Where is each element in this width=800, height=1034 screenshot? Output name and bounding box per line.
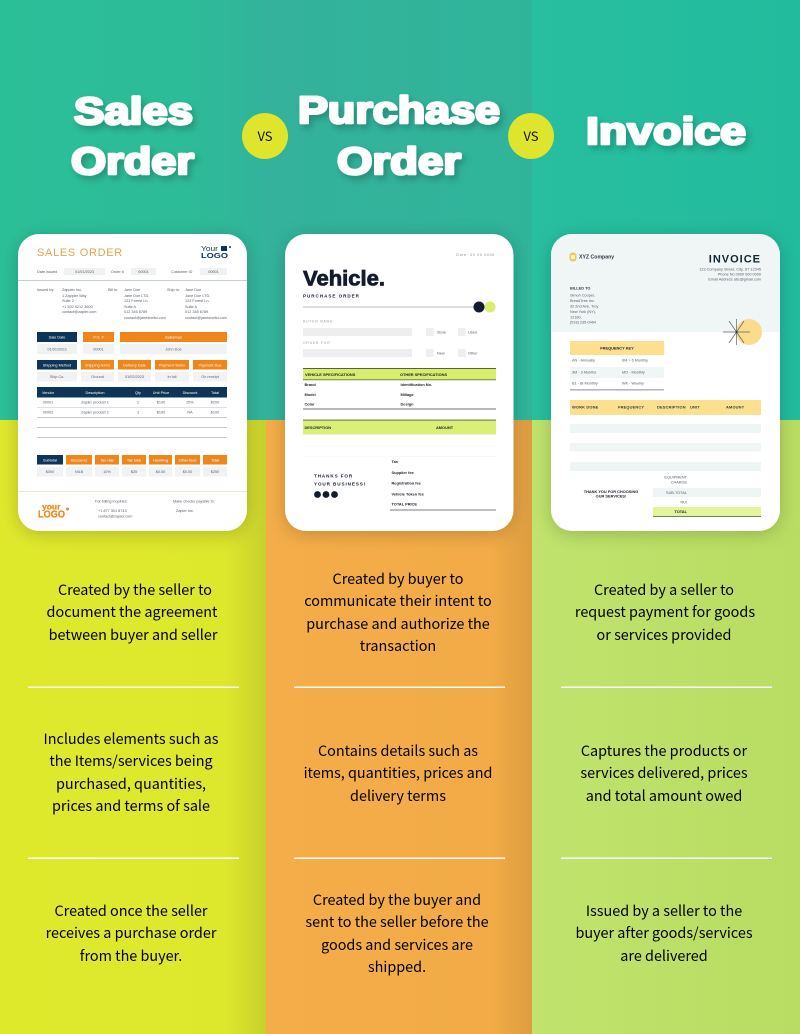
vehicle specifications table: Color	[304, 402, 315, 406]
address block: 1 Zappier Way	[62, 294, 87, 298]
address block: contact@janedoeltd.com	[124, 316, 166, 320]
totals block: CHARGE	[671, 480, 687, 484]
address block: Issued by:	[37, 288, 54, 292]
fee summary: TOTAL PRICE	[392, 502, 417, 506]
totals table: 10%	[103, 470, 111, 474]
sale info table: John Doe	[165, 348, 182, 352]
totals table: Other fees	[179, 458, 196, 462]
company address	[699, 268, 761, 282]
text block: purchase order contents: Contains details such as	[318, 740, 478, 761]
icon: your logo navy: Your	[201, 246, 219, 253]
shipping info table: Shipping Method	[43, 363, 71, 367]
address block: Jane Doe	[124, 288, 140, 292]
icon: your logo orange	[38, 502, 69, 520]
billed to block: Simon Cooper,	[570, 294, 595, 298]
text block: sales order timing: Created once the seller	[54, 900, 208, 921]
totals block: TAX	[680, 500, 687, 504]
frequency key table: FREQUENCY KEY	[600, 346, 634, 350]
panel: sales order document	[18, 234, 247, 531]
icon: your logo navy: LOGO	[201, 251, 228, 260]
fee summary: Supplier fee	[392, 470, 415, 475]
order meta row: Customer ID	[171, 270, 193, 274]
sale info table	[37, 332, 227, 354]
work table: AMOUNT	[726, 404, 745, 410]
line items table: Discount	[183, 391, 198, 395]
totals block: TOTAL	[674, 509, 688, 514]
icon: your logo orange: LOGO	[38, 510, 65, 520]
line items table: Zapier product 2	[81, 410, 109, 414]
text block: purchase order purpose: transaction	[360, 635, 436, 656]
line items table: 00001	[43, 400, 53, 404]
address block: 012 345 6789	[124, 310, 147, 314]
order meta row: Order #	[111, 270, 125, 274]
totals table: NIL$	[75, 470, 84, 474]
footer contact text: Make checks payable to:	[173, 500, 215, 504]
text block: purchase order purpose: purchase and authorize the	[306, 613, 490, 634]
text block: purchase order purpose: communicate their intent to	[304, 590, 492, 611]
address block: Suite 2	[62, 299, 74, 303]
work table	[570, 400, 761, 471]
address block: Bill to:	[108, 288, 118, 292]
sale info table: Sale Date	[49, 336, 65, 340]
buyer form fields: New	[437, 352, 445, 356]
text block: invoice purpose: request payment for goods	[575, 601, 755, 622]
totals table: Total	[211, 458, 219, 462]
panel: invoice column background	[532, 0, 800, 1034]
sale info table: 00001	[93, 348, 104, 352]
line items table: Total	[211, 391, 219, 395]
text block: sales order timing: from the buyer.	[80, 945, 182, 966]
frequency key table: MO - Monthly	[622, 370, 645, 374]
fee summary: Tax	[392, 459, 399, 464]
shipping info table: Payment Terms	[159, 363, 185, 367]
document title: INVOICE: INVOICE	[709, 254, 761, 266]
thanks message: YOUR BUSINESS!	[314, 482, 366, 486]
footer contact text: For billing inquiries:	[95, 500, 128, 504]
icon: VS badge one: VS	[257, 126, 273, 145]
panel: purchase order document	[285, 234, 514, 531]
shipping info table: Ship Co.	[50, 375, 64, 379]
line items table: 25%	[186, 400, 194, 404]
line items table: Zapier product 1	[81, 400, 109, 404]
text block: invoice contents: services delivered, prices	[580, 762, 748, 783]
line items table: 2	[137, 400, 139, 404]
billed to block	[570, 286, 599, 324]
icon: your logo navy	[201, 246, 231, 260]
text block: purchase order contents: items, quantities, prices and	[304, 762, 492, 783]
buyer form fields	[303, 320, 478, 357]
address block: Ship to:	[167, 288, 180, 292]
text block: sales order purpose: Created by the seller to	[58, 579, 212, 600]
text block: purchase order timing: goods and services are	[321, 934, 473, 955]
buyer form fields: ORDER FOR	[303, 341, 330, 345]
text block: sales order purpose: document the agreement	[47, 601, 218, 622]
sale info table: 01/01/2023	[47, 348, 67, 352]
shipping info table: Payment Due	[198, 363, 222, 367]
work table: FREQUENCY	[618, 404, 644, 410]
frequency key table	[570, 341, 664, 390]
panel: invoice document	[551, 234, 780, 531]
order meta row: 01/01/2023	[75, 270, 94, 274]
icon: sun and star burst	[723, 319, 762, 345]
heading: Sales Order: Sales	[74, 91, 193, 133]
line items table: 1	[137, 410, 139, 414]
footer contact text	[95, 500, 215, 518]
date: Date: 00 00 0000	[456, 253, 495, 257]
subtitle: PURCHASE ORDER: PURCHASE ORDER	[303, 294, 360, 298]
text block: invoice timing: Issued by a seller to the	[586, 900, 742, 921]
address block: Suite A	[124, 305, 136, 309]
totals table: Discounts	[71, 458, 87, 462]
company address: 123 Company Street, City, ST 12345	[699, 268, 761, 272]
shipping info table: On receipt	[201, 375, 220, 379]
line items table: NA	[187, 410, 193, 414]
line items table: Qty	[135, 391, 141, 395]
fee summary: Vehicle Token fee	[392, 492, 425, 496]
heading: Invoice: Invoice	[586, 111, 746, 153]
text block: sales order timing: receives a purchase order	[46, 922, 217, 943]
panel: sales order column background	[0, 0, 266, 1034]
icon: VS badge two: VS	[523, 126, 539, 145]
totals table	[37, 455, 227, 476]
totals table: $0.00	[183, 470, 192, 474]
billed to block: New York (NY),	[570, 310, 596, 314]
text block: purchase order timing: Created by the buyer and	[313, 889, 481, 910]
heading: Purchase Order: Purchase	[298, 90, 500, 132]
address block: contact@janedoeltd.com	[185, 316, 227, 320]
icon: VS badge one	[242, 113, 288, 159]
description and amount bar: AMOUNT	[436, 425, 454, 430]
line items table: Unit Price	[153, 391, 169, 395]
totals table: Tax total	[127, 458, 141, 462]
heading: Sales Order	[71, 91, 194, 183]
text block: invoice contents: and total amount owed	[586, 785, 742, 806]
text block: sales order contents: the Items/services being	[49, 750, 213, 771]
buyer form fields: Other	[468, 352, 478, 356]
description and amount bar	[303, 420, 496, 456]
totals table: $300	[46, 470, 54, 474]
vehicle specifications table: Brand	[304, 382, 316, 387]
totals table: $25	[131, 470, 137, 474]
invoice header band	[551, 234, 780, 332]
billed to block: 32 2nd Ave, Troy	[570, 304, 599, 308]
frequency key table: B1 - Bi Monthly	[572, 382, 598, 386]
footer contact text: +1 877 301 8743	[98, 509, 127, 513]
footer contact text: contact@zapier.com	[98, 514, 132, 518]
thank you message: THANK YOU FOR CHOOSING	[584, 489, 638, 494]
description and amount bar: DESCRIPTION	[304, 425, 331, 430]
totals table: Tax rate	[100, 458, 114, 462]
text block: purchase order purpose: Created by buyer to	[333, 568, 463, 589]
text block: sales order contents: purchased, quantities,	[56, 773, 206, 794]
address block	[37, 288, 227, 320]
vehicle specifications table: VEHICLE SPECIFICATIONS	[305, 372, 356, 377]
text block: invoice purpose: or services provided	[597, 624, 731, 645]
text block: invoice timing: are delivered	[620, 945, 708, 966]
icon: company logo	[570, 252, 576, 262]
text block: invoice purpose: Created by a seller to	[594, 579, 734, 600]
totals block: SUB-TOTAL	[666, 491, 687, 495]
heading: Sales Order: Order	[71, 141, 194, 183]
icon: your logo orange: your	[42, 502, 61, 512]
text block: sales order contents: prices and terms of sale	[52, 795, 210, 816]
shipping info table: In full	[167, 375, 177, 379]
totals table: $250	[211, 470, 219, 474]
address block: Zappier Inc.	[62, 288, 82, 292]
order meta row	[37, 268, 227, 275]
text block: invoice timing: buyer after goods/services	[575, 922, 753, 943]
footer contact text: Zapier Inc.	[176, 509, 194, 513]
company address: Phone No 0000 000 0000	[718, 272, 761, 276]
line items table: Vendor	[42, 391, 55, 395]
thank you message	[584, 489, 638, 498]
icons: social media	[314, 491, 338, 498]
totals table: Subtotal	[43, 458, 57, 462]
totals table: $0.00	[156, 470, 165, 474]
fee summary: Registration fee	[392, 480, 422, 486]
decorative header line with dots	[303, 302, 496, 312]
frequency key table: AN - Annually	[572, 358, 595, 362]
line items table: 00002	[43, 410, 53, 414]
address block: contact@zapier.com	[62, 310, 96, 314]
billed to block: 12180,	[570, 316, 582, 320]
line items table: $100	[211, 410, 219, 414]
dividers	[28, 686, 772, 859]
work table: DESCRIPTION	[657, 404, 686, 410]
text block: sales order contents: Includes elements such as	[44, 728, 219, 749]
fee summary	[390, 456, 496, 510]
shipping info table: Ground	[91, 375, 104, 379]
address block: Jane Doe	[185, 288, 201, 292]
address block: 123 Forest Ln.	[185, 299, 209, 303]
panel: purchase order column background	[266, 0, 532, 1034]
vehicle specifications table: Identification No.	[400, 382, 432, 387]
thanks message: THANKS FOR	[314, 474, 353, 478]
shipping info table: Shipping terms	[85, 363, 110, 367]
company name: XYZ Company	[579, 254, 614, 260]
frequency key table: 6M = 6 Monthly	[622, 358, 648, 362]
totals block	[653, 476, 761, 517]
address block: Jane Doe LTD.	[185, 294, 210, 298]
billed to block: BILLED TO	[570, 286, 590, 290]
vehicle specifications table	[303, 368, 496, 410]
text block: purchase order timing: sent to the seller before the	[305, 911, 489, 932]
buyer form fields: BUYER NAME	[303, 320, 333, 324]
text block: purchase order contents: delivery terms	[350, 785, 446, 806]
vehicle specifications table: Model	[304, 392, 316, 397]
sale info table: Salesman	[165, 336, 182, 340]
document title: Vehicle.: Vehicle.	[303, 266, 385, 290]
address block: Jane Doe LTD.	[124, 294, 149, 298]
line items table: Description	[86, 391, 104, 395]
frequency key table: 3M - 3 Months	[572, 370, 596, 374]
buyer form fields: Used	[468, 330, 477, 334]
billed to block: BreadTree Inc.	[570, 299, 595, 303]
work table: UNIT	[690, 404, 700, 410]
document title: SALES ORDER: SALES ORDER	[37, 247, 123, 259]
shipping info table	[37, 360, 227, 382]
text block: sales order purpose: between buyer and seller	[49, 624, 218, 645]
buyer form fields: Store	[437, 330, 446, 334]
vehicle specifications table: OTHER SPECIFICATIONS	[400, 372, 447, 377]
order meta row: 00001	[138, 270, 149, 274]
address block: +1 520 5212 3600	[62, 305, 93, 309]
vehicle specifications table: Design	[400, 402, 414, 406]
thanks message	[314, 474, 366, 498]
frequency key table: WK - Weekly	[622, 382, 644, 386]
totals table: Handling	[153, 458, 168, 462]
company address: Email Address abc@gmail.com	[708, 278, 761, 282]
order meta row: 00001	[208, 270, 219, 274]
order meta row: Date Issued	[37, 270, 57, 274]
thank you message: OUR SERVICES!	[596, 494, 626, 498]
work table: WORK DONE	[572, 404, 599, 410]
totals block: EQUIPMENT	[664, 476, 688, 480]
icon: VS badge two	[508, 113, 554, 159]
line items table: $200	[211, 400, 219, 404]
shipping info table: 01/02/2023	[125, 375, 144, 379]
heading: Purchase Order: Order	[337, 141, 461, 183]
billed to block: (518) 235-0464	[570, 320, 596, 324]
address block: 123 Forest Ln.	[124, 299, 148, 303]
line items table: $100	[157, 400, 165, 404]
heading: Purchase Order	[298, 90, 500, 183]
address block: Suite A	[185, 305, 197, 309]
line items table: $100	[157, 410, 165, 414]
shipping info table: Delivery Date	[123, 363, 146, 367]
text block: purchase order timing: shipped.	[368, 956, 426, 977]
sale info table: P.O. #	[93, 336, 105, 340]
line items table	[37, 387, 227, 438]
vehicle specifications table: Millage	[400, 392, 415, 397]
address block: 012 345 6789	[185, 310, 208, 314]
text block: invoice contents: Captures the products or	[581, 740, 748, 761]
